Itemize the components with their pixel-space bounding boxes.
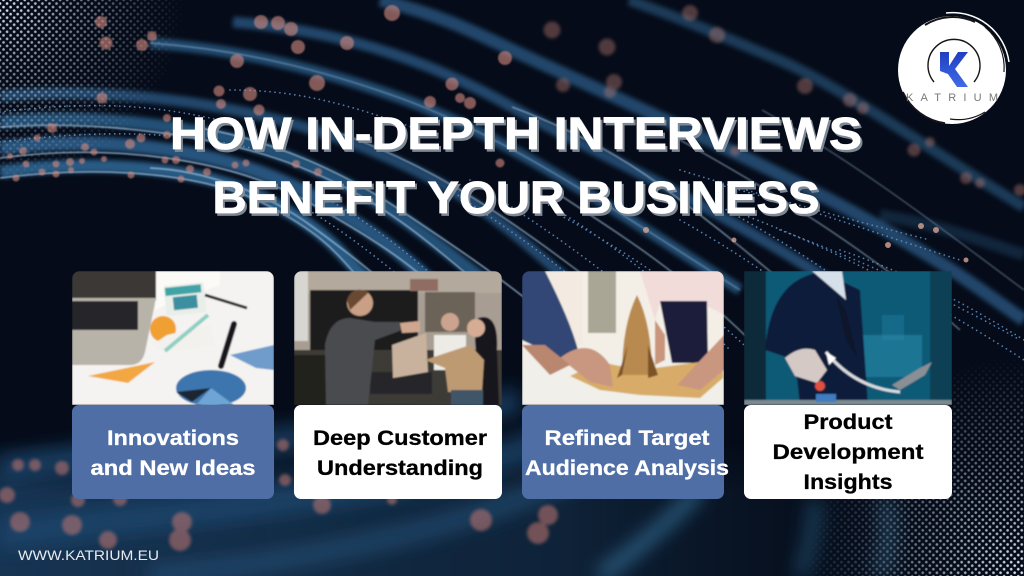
- card 4: Product Development Insights: [744, 271, 952, 499]
- label text: Refined Target: [544, 427, 710, 450]
- photo: desk with charts: [72, 271, 274, 406]
- title: BENEFIT YOUR BUSINESS: [212, 172, 819, 223]
- card 1: Innovations and New Ideas: and New Ideas: [90, 457, 256, 480]
- title: HOW IN-DEPTH INTERVIEWS: [172, 110, 864, 162]
- label panel: [522, 405, 724, 499]
- photo: businessman and growth arrow: [744, 271, 952, 405]
- website url: WWW.KATRIUM.EU: [18, 547, 159, 563]
- label text: Product: [804, 411, 892, 434]
- title: HOW IN-DEPTH INTERVIEWS: [170, 108, 862, 159]
- card 4: Product Development Insights: Development: [772, 441, 924, 464]
- label panel: [744, 405, 952, 499]
- card 3: Refined Target Audience Analysis: [522, 271, 729, 499]
- label panel: [294, 405, 502, 499]
- person: [325, 318, 402, 405]
- logo K: [940, 52, 968, 87]
- title: BENEFIT YOUR BUSINESS: [214, 174, 821, 226]
- card 4: Product Development Insights: Insights: [804, 471, 892, 494]
- photo: shop assistant and customers: [294, 271, 502, 405]
- card 3: Refined Target Audience Analysis: Audience Analysis: [525, 457, 729, 480]
- label text: Deep Customer: [313, 427, 487, 450]
- logo wordmark: KATRIUM: [906, 92, 998, 104]
- card 2: Deep Customer Understanding: [294, 271, 502, 499]
- title: [170, 108, 864, 226]
- card 2: Deep Customer Understanding: Understanding: [317, 457, 483, 480]
- label panel: [72, 405, 274, 499]
- card 1: Innovations and New Ideas: [72, 271, 274, 499]
- halftone: [0, 0, 176, 174]
- photo: hands with wooden gears and rocket: [522, 271, 724, 405]
- label text: Innovations: [107, 427, 239, 450]
- logo: Katrium badge: [898, 13, 1009, 124]
